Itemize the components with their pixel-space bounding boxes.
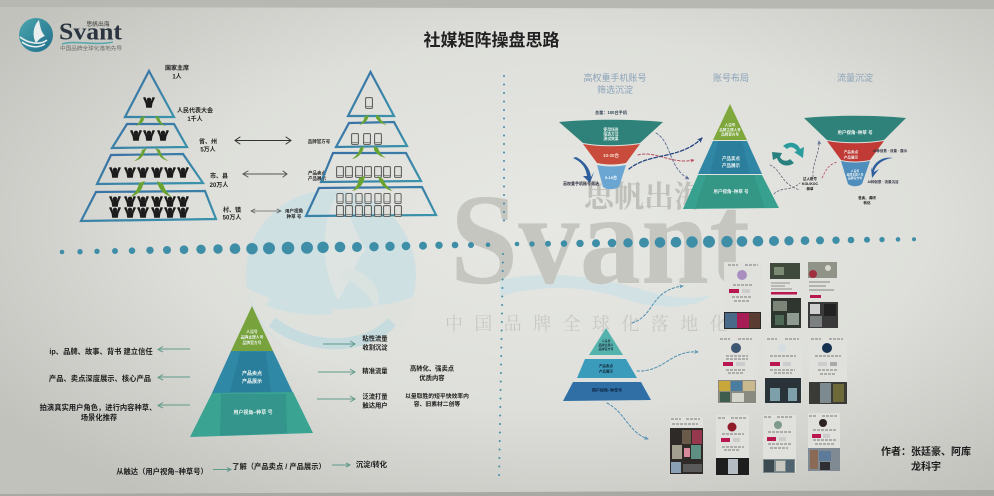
funnel path text: 从触达（用户视角–种草号） bbox=[116, 467, 208, 476]
green arrows bbox=[352, 115, 393, 191]
funnel: traffic: 品牌官方号 bbox=[848, 176, 862, 180]
screenshot r1c1 bbox=[724, 262, 762, 330]
funnel: screening bbox=[559, 109, 663, 189]
pyramid: lower-right bbox=[563, 328, 651, 401]
pyramid: lower-right: 人设号 bbox=[601, 338, 611, 343]
account type labels: 产品展示 bbox=[308, 175, 326, 182]
right traffic labels: 收割沉淀 bbox=[362, 342, 388, 352]
funnel: screening: 10-30台 bbox=[603, 152, 620, 159]
pyramid: lower-right: 品牌官方号 bbox=[598, 346, 614, 351]
left arrows bbox=[158, 346, 190, 408]
right traffic labels: 精准流量 bbox=[362, 366, 388, 375]
right arrows bbox=[317, 341, 355, 402]
traffic annotations: KOL\KOC bbox=[802, 182, 819, 186]
dashed connectors: KOL bbox=[770, 141, 837, 194]
pyramid labels: people: 省、州 bbox=[199, 138, 217, 146]
pyramid labels: people: 国家主席 bbox=[165, 64, 189, 72]
dashed connectors bbox=[629, 133, 702, 179]
logo: Svant bbox=[59, 20, 122, 46]
screenshot r2c1 bbox=[718, 337, 756, 404]
left benefit labels: ip、品牌、故事、背书 建立信任 bbox=[49, 347, 153, 356]
pyramid labels: people: 5万人 bbox=[200, 146, 216, 154]
pyramid: lower-left funnel bbox=[190, 306, 313, 437]
right traffic labels: 以量取胜的短平快效率内 bbox=[405, 392, 469, 400]
dotted divider: vertical bbox=[499, 76, 504, 482]
section titles bbox=[583, 72, 873, 95]
right traffic labels bbox=[362, 334, 469, 410]
funnel: traffic: 产品卖点 bbox=[844, 149, 859, 154]
icon: cycle arrows bbox=[772, 143, 804, 165]
account type labels: 用户视角 bbox=[285, 208, 303, 214]
right traffic labels: 粘性流量 bbox=[362, 334, 388, 342]
pyramid: lower-left funnel: 产品展示 bbox=[242, 378, 262, 385]
right traffic labels: 触达用户 bbox=[362, 400, 388, 410]
screenshot r1c2 bbox=[770, 263, 801, 328]
pyramid: account layout: 用户视角–种草 号 bbox=[713, 188, 749, 195]
pyramid labels: people: 50万人 bbox=[223, 214, 241, 222]
pyramid: lower-right: 品牌主理人 bbox=[598, 342, 614, 347]
section titles: 高权重手机账号 bbox=[583, 72, 647, 83]
pyramid: lower-left funnel: 人设号 bbox=[246, 329, 258, 334]
pyramid: account layout: 人设号 bbox=[725, 122, 736, 127]
funnel: traffic bbox=[804, 116, 906, 186]
pyramid: lower-left funnel: 品牌官方号 bbox=[243, 340, 262, 345]
left benefit labels bbox=[40, 347, 156, 422]
pyramid labels: people: 人民代表大会 bbox=[177, 106, 213, 114]
traffic annotations bbox=[802, 148, 908, 205]
funnel path text: 沉淀/转化 bbox=[356, 460, 388, 469]
pyramid labels: people: 1千人 bbox=[187, 115, 203, 123]
watermark: slogan: 中国品牌全球化落地化 bbox=[445, 310, 739, 336]
left benefit labels: 场景化推荐 bbox=[81, 413, 117, 422]
screenshot r2c3 bbox=[809, 337, 847, 404]
pyramid labels: people: 村、镇 bbox=[223, 206, 241, 214]
pyramid: lower-right: 产品展示 bbox=[599, 368, 613, 374]
screenshot r2c2 bbox=[765, 337, 802, 403]
screenshot r3c1 bbox=[716, 415, 749, 475]
account type labels: 品牌官方号 bbox=[308, 138, 331, 145]
traffic annotations: 转化 bbox=[864, 200, 871, 205]
pyramid: account layout: 产品展示 bbox=[722, 162, 740, 169]
screenshot r1c3 bbox=[808, 262, 838, 328]
funnel path text: 了解（产品卖点 / 产品展示） bbox=[232, 462, 326, 471]
author credit: 作者：张廷豪、阿库 bbox=[881, 445, 971, 458]
watermark: Chinese brand name: 思帆出海 bbox=[584, 172, 704, 216]
right traffic labels: 泛流打量 bbox=[362, 392, 388, 400]
section titles: 账号布局 bbox=[713, 72, 749, 83]
phone icons bbox=[337, 98, 401, 216]
pyramid labels: people: 市、县 bbox=[210, 172, 228, 180]
account type labels: 种草 号 bbox=[287, 213, 302, 220]
pyramid: account layout: 品牌主理人号 bbox=[719, 127, 741, 132]
right traffic labels: 高转化、强卖点 bbox=[410, 364, 455, 372]
logo: 思帆出海 bbox=[86, 20, 110, 28]
pyramid: lower-left funnel: 产品卖点 bbox=[242, 370, 262, 377]
traffic annotations: AI种创意 · 流量 · 展示 bbox=[873, 148, 908, 153]
traffic annotations: AI种创意 · 流量沉淀 bbox=[867, 179, 899, 184]
funnel: screening: 高权重手机账号筛选 bbox=[563, 180, 599, 186]
pyramid: lower-right: 用户视角–种草号 bbox=[592, 386, 622, 392]
left benefit labels: 产品、卖点深度展示、核心产品 bbox=[49, 374, 151, 383]
title: 社媒矩阵操盘思路 bbox=[424, 30, 560, 50]
pyramid: account layout: 品牌官方号 bbox=[721, 132, 739, 136]
section titles: 筛选沉淀 bbox=[597, 84, 633, 95]
double arrows bbox=[235, 137, 291, 213]
left benefit labels: 拍演真实用户角色，进行内容种草、 bbox=[40, 403, 156, 412]
people icons bbox=[109, 97, 189, 218]
traffic annotations: 种草 bbox=[806, 186, 814, 191]
funnel: traffic: 品牌主理人号 bbox=[847, 172, 864, 176]
funnel: screening: 5-10台 bbox=[605, 174, 617, 180]
social media screenshots bbox=[670, 262, 847, 475]
funnel: traffic: 产品展示 bbox=[844, 154, 859, 160]
watermark: brand name: Svant bbox=[450, 168, 750, 312]
screenshot r3c3 bbox=[808, 413, 840, 471]
funnel: traffic: 人设号 bbox=[851, 169, 859, 173]
pyramid: account layout: 产品卖点 bbox=[722, 155, 740, 162]
funnel: screening: 使用场景 bbox=[603, 127, 619, 132]
pyramid: lower-left funnel: 用户视角–种草 号 bbox=[233, 409, 273, 416]
pyramid: phones bbox=[306, 72, 436, 216]
pyramid labels: people: 1人 bbox=[172, 74, 182, 80]
logo bbox=[19, 18, 122, 52]
author credit: 龙科宇 bbox=[911, 460, 941, 473]
author credit bbox=[881, 445, 971, 473]
funnel: screening: 测试效果 bbox=[603, 136, 619, 141]
pyramid: lower-right: 产品卖点 bbox=[599, 363, 613, 368]
funnel: traffic: 用户视角–种草 号 bbox=[837, 129, 873, 136]
account type labels bbox=[285, 138, 331, 220]
pyramid: people bbox=[81, 71, 216, 221]
traffic annotations: 达人账号 bbox=[803, 176, 817, 181]
funnel: screening: 筛选方法 bbox=[603, 132, 619, 136]
account type labels: 产品卖点 bbox=[308, 170, 326, 176]
pyramid labels: people: 20万人 bbox=[210, 182, 228, 189]
watermark: logo disc bbox=[246, 190, 416, 361]
screenshot r3c0 bbox=[670, 417, 703, 474]
dashed connectors: lower right bbox=[607, 286, 698, 439]
traffic annotations: 售卖、调研 bbox=[858, 195, 876, 200]
right traffic labels: 优质内容 bbox=[419, 373, 445, 382]
screenshot r3c2 bbox=[763, 415, 796, 473]
logo: 中国品牌全球化落地先导 bbox=[60, 44, 122, 52]
right traffic labels: 容、旧素材二创等 bbox=[414, 400, 460, 408]
pyramid labels: people bbox=[165, 64, 241, 222]
funnel path text bbox=[116, 460, 388, 476]
section titles: 流量沉淀 bbox=[837, 72, 873, 83]
funnel: screening: 总量：100台手机 bbox=[595, 109, 628, 116]
watermark: wave bbox=[500, 275, 712, 307]
dotted divider: horizontal bbox=[60, 236, 916, 254]
pyramid: account layout bbox=[683, 104, 779, 209]
pyramid: lower-left funnel: 品牌主理人号 bbox=[241, 334, 264, 340]
green arrows bbox=[130, 116, 172, 197]
